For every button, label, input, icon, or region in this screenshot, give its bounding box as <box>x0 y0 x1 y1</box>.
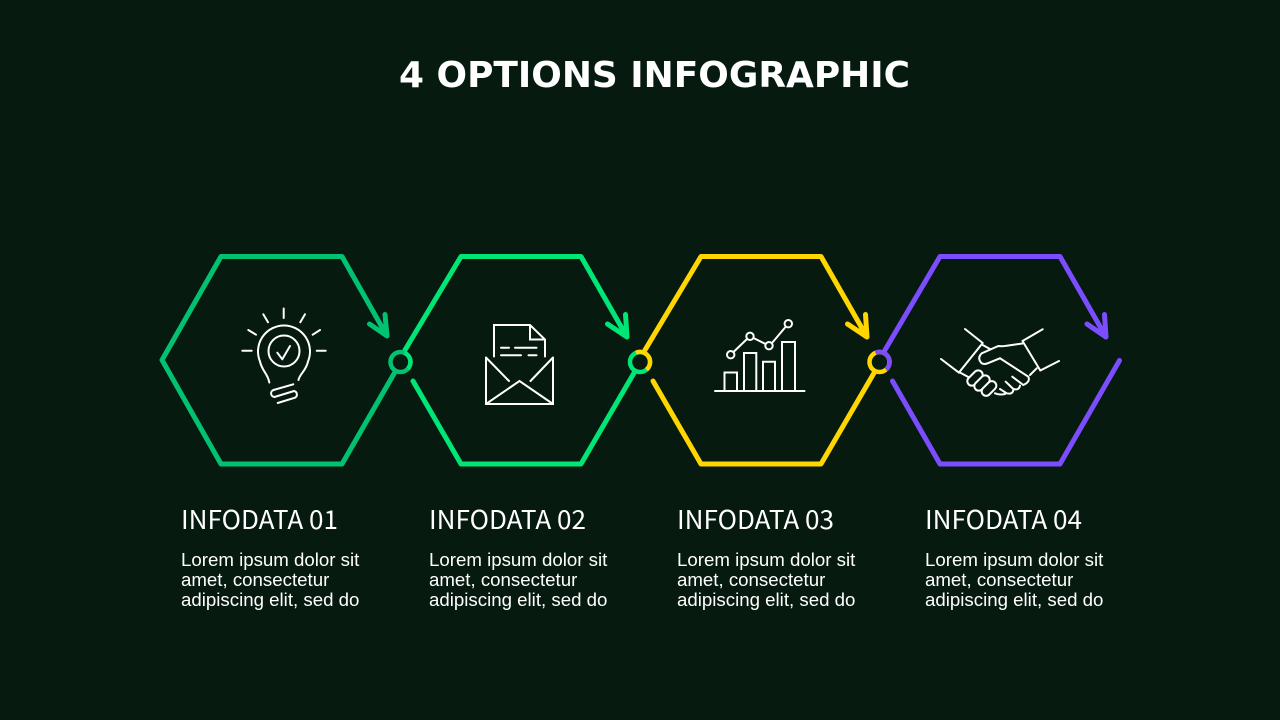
heading 01: INFODATA 01 <box>181 500 338 537</box>
hexagon outline 2 with arrow <box>405 256 634 464</box>
hexagon outline 4 with arrow <box>885 256 1120 464</box>
icon: bar chart with trend line <box>715 320 804 391</box>
body 01: amet, consectetur <box>181 569 329 590</box>
heading 03: INFODATA 03 <box>677 500 834 537</box>
body 02: adipiscing elit, sed do <box>429 589 607 610</box>
body 03: Lorem ipsum dolor sit <box>677 549 856 570</box>
panel: option 2 hexagon <box>405 256 634 464</box>
heading 02: INFODATA 02 <box>429 500 586 537</box>
heading 04: INFODATA 04 <box>925 500 1082 537</box>
body 03: amet, consectetur <box>677 569 825 590</box>
connector ring 1 <box>390 352 410 372</box>
hexagon outline 1 with arrow <box>162 256 395 464</box>
body 02: amet, consectetur <box>429 569 577 590</box>
text block: infodata 02 <box>429 500 608 610</box>
body 01: adipiscing elit, sed do <box>181 589 359 610</box>
panel: option 4 hexagon <box>885 256 1120 464</box>
panel: option 1 hexagon <box>162 256 395 464</box>
body 04: Lorem ipsum dolor sit <box>925 549 1104 570</box>
icon: light bulb <box>242 308 326 403</box>
connector ring 3 <box>870 352 890 372</box>
icon: envelope with letter <box>486 325 553 404</box>
body 03: adipiscing elit, sed do <box>677 589 855 610</box>
title: 4 OPTIONS INFOGRAPHIC <box>399 55 910 96</box>
text block: infodata 03 <box>677 500 856 610</box>
text block: infodata 01 <box>181 500 360 610</box>
body 04: adipiscing elit, sed do <box>925 589 1103 610</box>
body 04: amet, consectetur <box>925 569 1073 590</box>
connector ring 2 <box>630 352 650 372</box>
body 01: Lorem ipsum dolor sit <box>181 549 360 570</box>
body 02: Lorem ipsum dolor sit <box>429 549 608 570</box>
icon: handshake <box>941 329 1059 398</box>
text block: infodata 04 <box>925 500 1104 610</box>
panel: option 3 hexagon <box>645 256 874 464</box>
hexagon outline 3 with arrow <box>645 256 874 464</box>
